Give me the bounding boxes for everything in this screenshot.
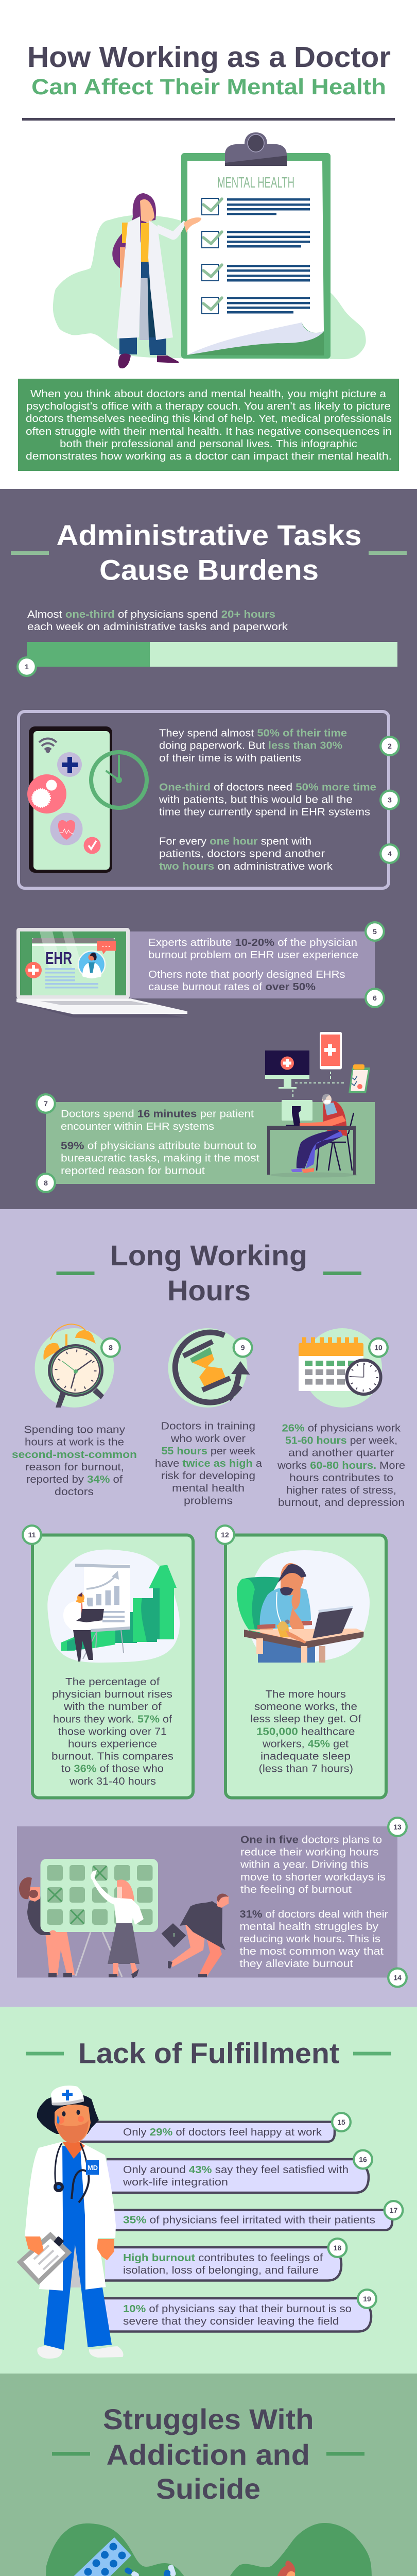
text: reducing hours: they alleviate burnout <box>239 1958 353 1970</box>
badge 11: 11 <box>28 1531 36 1539</box>
text: card 2 <box>250 1689 361 1775</box>
badges 7-8: 7 <box>44 1099 48 1108</box>
badges 15-19: 18 <box>334 2244 341 2252</box>
text: encounter: Doctors spend 16 minutes per patient <box>61 1109 254 1120</box>
badges 15-19: 17 <box>390 2206 397 2214</box>
icon: phone <box>27 726 112 873</box>
badges 8-10: 10 <box>374 1344 383 1352</box>
text: time spent: of their time is with patients <box>159 753 301 764</box>
stat: one-third text <box>27 609 288 633</box>
badges 15-19: 16 <box>359 2156 367 2164</box>
pill: 35% irritated: 35% of physicians feel irritated with their patients <box>123 2214 375 2226</box>
illustration: exhausted doctor: MD <box>88 2164 98 2172</box>
text: column 1: doctors <box>55 1486 94 1498</box>
panel: encounter time <box>36 1032 375 1193</box>
panel: time spent <box>19 711 400 888</box>
text: column 2: who work over <box>170 1433 246 1445</box>
title: Can Affect Their Mental Health <box>31 75 386 99</box>
text: column 3: higher rates of stress, <box>286 1485 396 1496</box>
background blob <box>53 215 366 359</box>
checklist <box>227 198 310 313</box>
intro text: psychologist’s office with a therapy couch. You aren’t as likely to picture <box>26 401 391 412</box>
text: reducing hours: the most common way that <box>239 1946 384 1957</box>
text: reducing hours: reduce their working hours <box>240 1847 379 1858</box>
heading: Cause Burdens <box>99 553 319 586</box>
pill: 10% leaving <box>103 2298 371 2332</box>
badges 8-10: 8 <box>109 1344 113 1352</box>
badges 13-14: 14 <box>393 1973 402 1981</box>
text: encounter: 59% of physicians attribute burnout to <box>61 1141 256 1152</box>
text: column 3: 26% of physicians work <box>282 1423 401 1434</box>
card: burnout rises with hours <box>22 1524 193 1798</box>
badges 8-10 <box>100 1337 389 1358</box>
text: column 3 <box>277 1423 405 1509</box>
text: time spent: One-third of doctors need 50% more time <box>159 782 376 793</box>
text: column 1: hours at work is the <box>25 1437 124 1448</box>
title <box>27 41 391 99</box>
text: reducing hours: mental health struggles by <box>239 1921 378 1933</box>
text: column 2: Doctors in training <box>161 1421 255 1432</box>
text: reducing hours: within a year. Driving this <box>240 1859 369 1871</box>
text: column 2: risk for developing <box>161 1470 255 1482</box>
heading: Addiction and <box>107 2438 310 2471</box>
badges 7-8: 8 <box>44 1179 48 1187</box>
pill: high burnout <box>105 2247 341 2280</box>
section: long working hours <box>0 1209 417 2007</box>
text: column 2: have twice as high a <box>155 1458 263 1469</box>
text: column 3: 51-60 hours per week, <box>285 1435 397 1447</box>
illustration: team with calendar <box>19 1859 229 1978</box>
pill: 35% irritated <box>113 2210 392 2230</box>
text: column 3: and another quarter <box>288 1448 394 1459</box>
section: administrative tasks <box>0 489 417 1209</box>
badges 13-14 <box>387 1817 408 1988</box>
badge 12: 12 <box>221 1531 229 1539</box>
pill: 29% happy: Only 29% of doctors feel happy at work <box>123 2127 322 2138</box>
heading: Struggles With <box>103 2403 314 2435</box>
text: card 1: hours experience <box>68 1738 157 1750</box>
text: card 1: work 31-40 hours <box>69 1776 156 1787</box>
panel: EHR <box>16 921 385 1018</box>
heading: Long Working <box>110 1239 307 1272</box>
section: addiction and suicide <box>0 2374 417 2576</box>
text: time spent <box>159 727 376 872</box>
section: lack of fulfillment <box>0 2007 417 2374</box>
heading: Suicide <box>156 2472 260 2505</box>
illustration: doctor with alcohol and pills <box>25 2523 202 2576</box>
text: time spent: with patients, but this would be all the <box>159 794 353 806</box>
text: time spent: For every one hour spent with <box>159 836 311 848</box>
text: reducing hours: reducing work hours. This is <box>239 1934 380 1945</box>
pill: 10% leaving: severe that they consider leaving the field <box>123 2316 339 2327</box>
text: time spent: time they currently spend in EHR systems <box>159 807 370 818</box>
text: time spent: They spend almost 50% of their time <box>159 727 347 739</box>
text: encounter: reported reason for burnout <box>61 1165 205 1177</box>
badges 2-4: 3 <box>388 795 392 804</box>
heading <box>57 1239 361 1307</box>
illustration: patient at computer <box>265 1032 370 1178</box>
text: card 1: hours they work. 57% of <box>53 1714 172 1725</box>
text: card 1 <box>51 1676 173 1787</box>
heading <box>26 2037 391 2069</box>
text: column 3: burnout, and depression <box>278 1497 405 1509</box>
intro panel <box>18 379 399 471</box>
badges 7-8 <box>36 1093 56 1193</box>
text: encounter: encounter within EHR systems <box>61 1121 214 1132</box>
text: card 1: those working over 71 <box>58 1726 167 1737</box>
text: column 2 <box>155 1421 263 1506</box>
badge 1: 1 <box>25 663 29 671</box>
text: time spent: doing paperwork. But less than 30% <box>159 740 342 752</box>
badges 15-19 <box>327 2112 404 2309</box>
icon: wifi <box>39 739 57 752</box>
text: column 2: mental health <box>172 1483 245 1494</box>
text: reducing hours <box>239 1834 388 1970</box>
heading: Hours <box>167 1274 251 1307</box>
text: column 3: works 60-80 hours. More <box>277 1460 405 1471</box>
text: reducing hours: One in five doctors plans to <box>240 1834 382 1845</box>
text: card 1: The percentage of <box>65 1676 160 1688</box>
heading <box>11 519 407 586</box>
text: column 1: reason for burnout, <box>25 1462 124 1473</box>
text: EHR <box>148 937 358 993</box>
pill: high burnout: isolation, loss of belonging, and failure <box>123 2265 319 2276</box>
text: column 2: problems <box>184 1495 233 1506</box>
text: card 1: with the number of <box>63 1701 162 1713</box>
badges 2-4: 4 <box>388 850 392 858</box>
text: card 2: (less than 7 hours) <box>258 1764 353 1775</box>
text: time spent: patients, doctors spend another <box>159 849 325 860</box>
text: column 2: 55 hours per week <box>162 1446 256 1457</box>
badge 11 <box>22 1524 42 1545</box>
text: reducing hours: 31% of doctors deal with their <box>239 1909 388 1920</box>
icon: hourglass <box>168 1328 250 1408</box>
text: card 1: physician burnout rises <box>52 1689 172 1700</box>
text: card 2: someone works, the <box>254 1701 357 1713</box>
card: less sleep <box>215 1524 386 1798</box>
heading <box>52 2403 364 2505</box>
text: encounter: bureaucratic tasks, making it the most <box>61 1153 259 1164</box>
illustration: tired doctor at laptop <box>237 1550 370 1663</box>
text: column 3: hours contributes to <box>289 1472 393 1484</box>
text: card 1: burnout. This compares <box>51 1751 173 1762</box>
text: encounter <box>61 1109 259 1177</box>
pill: 43% satisfied <box>107 2159 369 2193</box>
badges 5-6 <box>364 921 385 1008</box>
blister pack <box>72 2538 130 2576</box>
badges 15-19: 19 <box>363 2295 371 2303</box>
title: How Working as a Doctor <box>27 41 391 74</box>
intro text: demonstrates how working as a doctor can impact their mental health. <box>26 451 392 462</box>
icon: calendar <box>299 1328 382 1408</box>
illustration: laptop: EHR <box>45 948 72 968</box>
capsules <box>124 2564 194 2576</box>
badge 12 <box>215 1524 235 1545</box>
badges 2-4 <box>379 736 400 864</box>
intro text: doctors themselves needing this kind of help. Yet, medical professionals <box>26 413 392 425</box>
stat pills <box>80 2122 392 2332</box>
clipboard <box>181 132 331 359</box>
icon: alarm clock <box>35 1324 114 1408</box>
text: time spent: two hours on administrative work <box>159 861 333 872</box>
intro text: both their professional and personal lives. This infographic <box>60 438 357 450</box>
text: column 1 <box>12 1425 137 1498</box>
progress bar <box>27 642 397 667</box>
badges 5-6: 5 <box>373 927 377 936</box>
badges 5-6: 6 <box>373 994 377 1002</box>
badge 1 <box>16 656 37 677</box>
icon: clock <box>91 752 147 808</box>
heading: Administrative Tasks <box>57 519 361 551</box>
text: column 1: reported by 34% of <box>26 1474 123 1485</box>
clipboard heading: MENTAL HEALTH <box>217 175 294 191</box>
intro text <box>26 388 392 462</box>
text: EHR: Experts attribute 10-20% of the physician <box>148 937 357 948</box>
badges 2-4: 2 <box>388 742 392 750</box>
pill: 43% satisfied: Only around 43% say they feel satisfied with <box>123 2164 349 2176</box>
text: EHR: Others note that poorly designed EHRs <box>148 969 345 980</box>
pill: 43% satisfied: work-life integration <box>123 2177 228 2188</box>
pill: 10% leaving: 10% of physicians say that their burnout is so <box>123 2303 352 2315</box>
illustration: laptop <box>16 928 187 1018</box>
illustration: doctor with mental health clipboard <box>53 132 366 368</box>
stat: one-third text: Almost one-third of physicians spend 20+ hours <box>27 609 275 620</box>
text: card 1: to 36% of those who <box>61 1764 164 1775</box>
heading: Lack of Fulfillment <box>78 2037 339 2069</box>
text: EHR: cause burnout rates of over 50% <box>148 981 316 993</box>
intro text: When you think about doctors and mental health, you might picture a <box>30 388 387 400</box>
text: column 1: second-most-common <box>12 1449 137 1461</box>
text: EHR: burnout problem on EHR user experience <box>148 950 358 961</box>
clip <box>225 132 287 166</box>
pill: high burnout: High burnout contributes to feelings of <box>123 2252 323 2264</box>
stat: one-third text: each week on administrative tasks and paperwork <box>27 621 288 633</box>
badges 15-19: 15 <box>337 2118 345 2126</box>
text: card 2: inadequate sleep <box>260 1751 351 1762</box>
intro text: often struggle with their mental health. It has negative consequences in <box>26 426 392 437</box>
text: card 2: 150,000 healthcare <box>256 1726 355 1737</box>
illustration: doctor reaching for pills <box>214 2523 391 2576</box>
pill: 29% happy <box>80 2122 335 2142</box>
badges 13-14: 13 <box>393 1823 402 1831</box>
text: card 2: The more hours <box>266 1689 346 1700</box>
illustration: presenter with chart <box>47 1550 180 1663</box>
text: reducing hours: move to shorter workdays is <box>240 1872 386 1883</box>
text: reducing hours: the feeling of burnout <box>240 1884 352 1895</box>
text: column 1: Spending too many <box>24 1425 125 1436</box>
illustration: exhausted doctor <box>16 2086 124 2359</box>
text: card 2: workers, 45% get <box>262 1738 349 1750</box>
text: card 2: less sleep they get. Of <box>250 1714 361 1725</box>
doctor figure <box>112 193 201 368</box>
panel: reducing hours <box>17 1817 408 1988</box>
badges 8-10: 9 <box>241 1344 245 1352</box>
